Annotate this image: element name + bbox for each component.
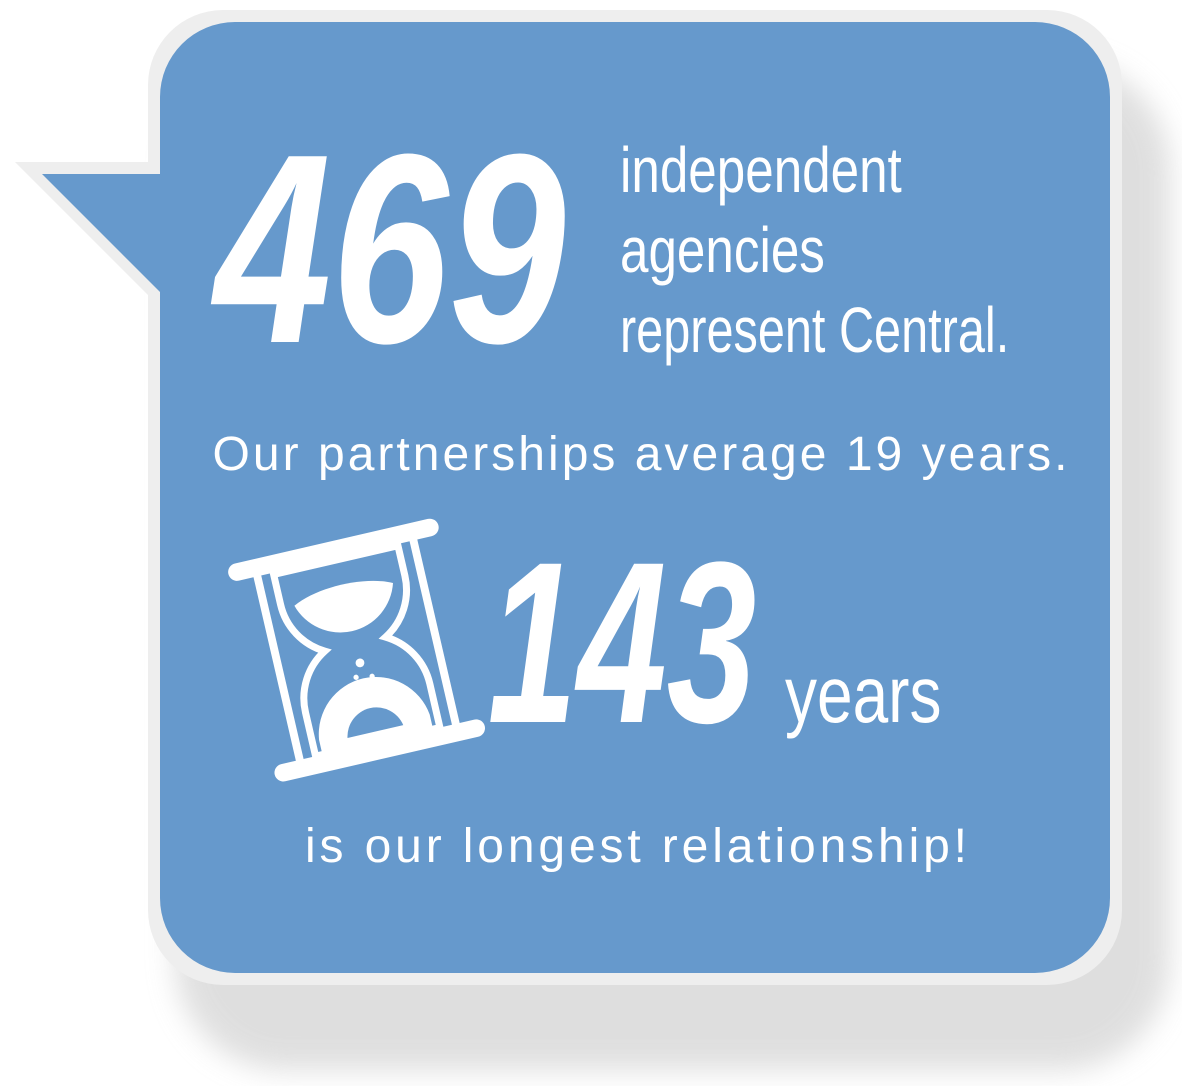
big number 469: 469 [210, 99, 566, 400]
text: independent agencies represent Central [620, 136, 1009, 367]
big number 143: 143 [488, 515, 756, 772]
text: partnerships average: Our partnerships average 19 years. [212, 428, 1068, 481]
text: independent agencies represent Central: represent Central. [620, 296, 1009, 367]
text: years: years [785, 650, 941, 740]
text: independent agencies represent Central: agencies [620, 216, 825, 286]
text: longest relationship: is our longest relationship! [305, 820, 967, 873]
shadow [175, 60, 1170, 1070]
icon: hourglass [226, 517, 487, 783]
text: independent agencies represent Central: independent [620, 136, 902, 206]
